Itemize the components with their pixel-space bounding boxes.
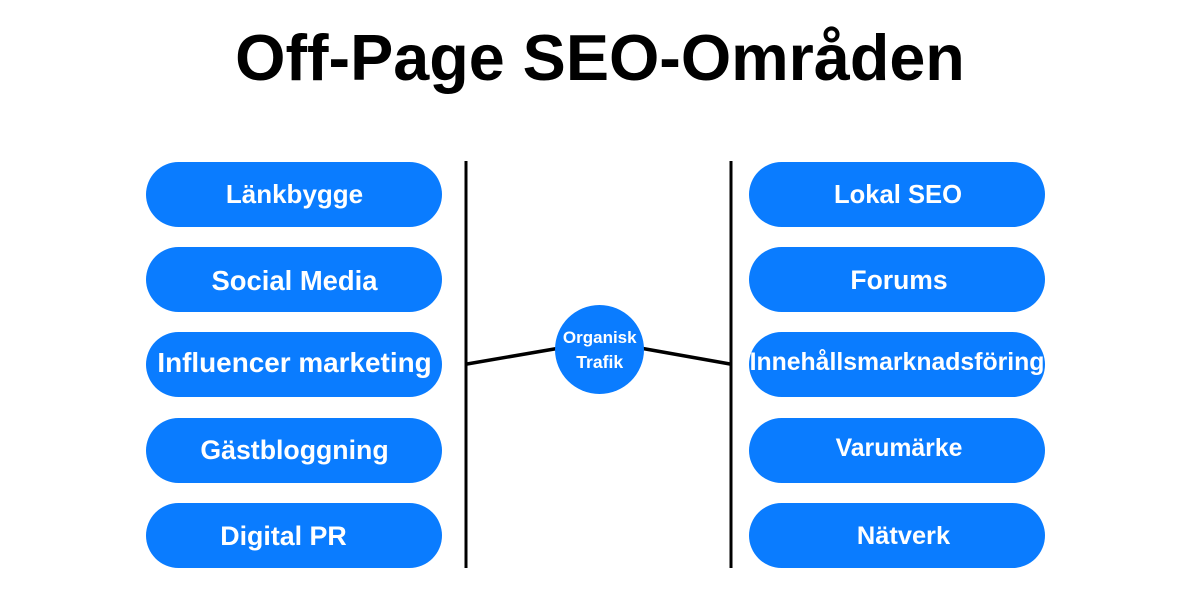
pill: Forums	[749, 247, 1045, 312]
pill: Nätverk: Nätverk	[857, 522, 950, 550]
pill: Influencer marketing: Influencer marketing	[157, 347, 432, 378]
pill: Social Media	[146, 247, 442, 312]
pill: Innehållsmarknadsföring: Innehållsmarknadsföring	[750, 349, 1044, 376]
pill: Länkbygge	[146, 162, 442, 227]
center circle: Organisk Trafik: Organisk	[563, 328, 637, 347]
pill: Gästbloggning	[146, 418, 442, 483]
pill: Influencer marketing	[146, 332, 442, 397]
pill: Gästbloggning: Gästbloggning	[200, 435, 389, 465]
pill: Digital PR	[146, 503, 442, 568]
pill: Varumärke: Varumärke	[836, 435, 962, 462]
pill: Social Media: Social Media	[212, 264, 377, 296]
pill: Nätverk	[749, 503, 1045, 568]
center circle: Organisk Trafik	[555, 305, 644, 394]
pill: Forums: Forums	[850, 265, 948, 295]
pill: Lokal SEO: Lokal SEO	[834, 181, 962, 209]
title: Off-Page SEO-Områden	[235, 21, 965, 94]
pill: Digital PR: Digital PR	[220, 521, 347, 551]
center circle: Organisk Trafik: Trafik	[576, 352, 623, 372]
panel: left pills	[146, 162, 442, 568]
pill: Innehållsmarknadsföring	[749, 332, 1045, 397]
pill: Varumärke	[749, 418, 1045, 483]
pill: Länkbygge: Länkbygge	[226, 179, 363, 209]
panel: right pills	[749, 162, 1045, 568]
pill: Lokal SEO	[749, 162, 1045, 227]
